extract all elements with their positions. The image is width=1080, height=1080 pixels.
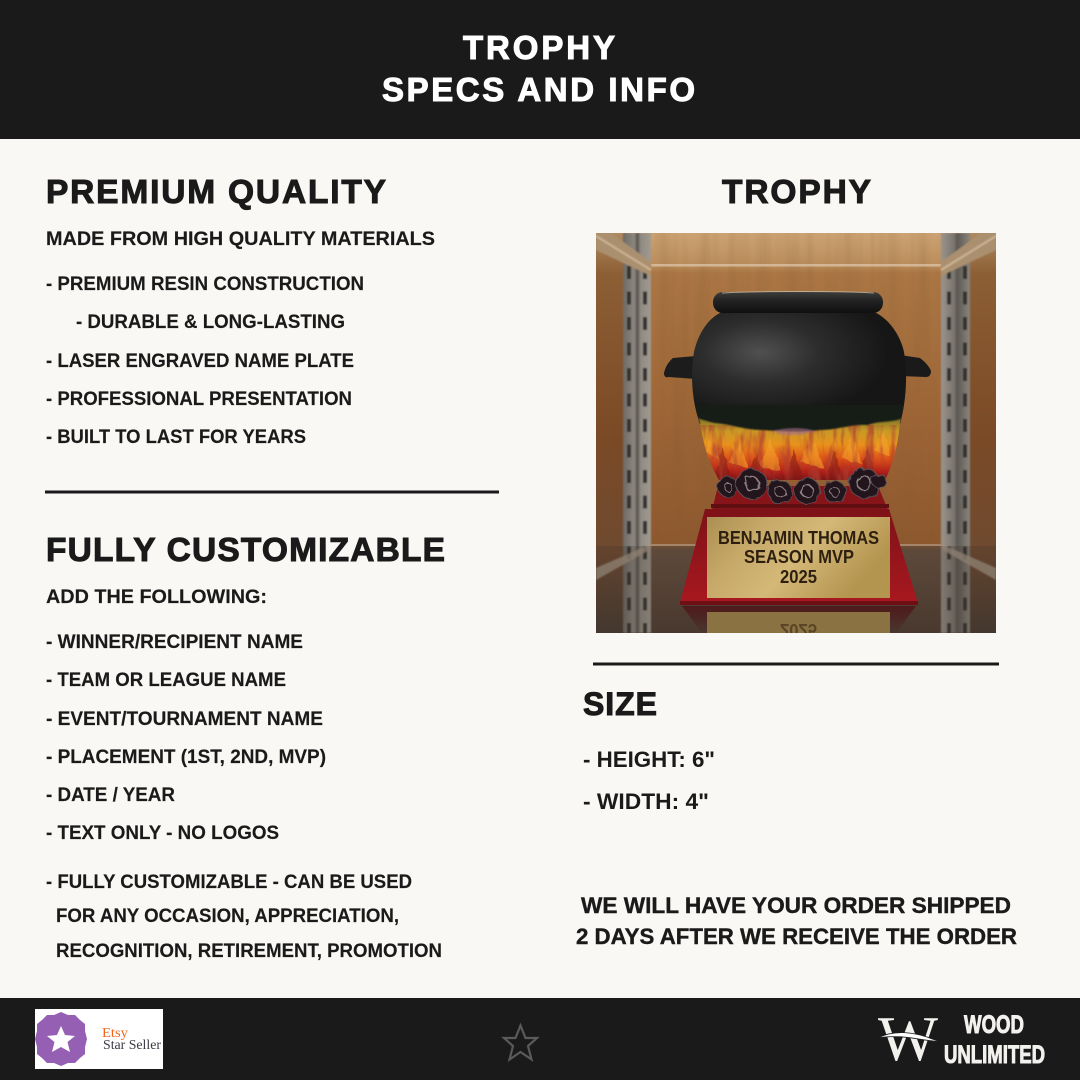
list: quality features: - PREMIUM RESIN CONSTRUCTION [46,273,364,295]
cauldron rim [713,292,883,313]
engraved name plate: 2025 [780,566,817,587]
engraved name plate: SEASON MVP [744,546,854,567]
display case background [596,233,996,633]
list: quality features: MADE FROM HIGH QUALITY MATERIALS [46,228,435,250]
list: customization options: - WINNER/RECIPIENT NAME [46,631,303,653]
cauldron handles [664,356,696,379]
list: customization options: - PLACEMENT (1ST, 2ND, MVP) [46,746,326,768]
shipping note [576,893,1017,949]
size values: - HEIGHT: 6" [583,747,715,772]
list: customization options: - DATE / YEAR [46,784,175,806]
title: TROPHY [463,29,615,66]
shipping note: WE WILL HAVE YOUR ORDER SHIPPED [581,893,1011,918]
footer band [0,998,1080,1080]
engraved name plate: BENJAMIN THOMAS [718,527,879,548]
header band with title [0,0,1080,139]
list: quality features: - DURABLE & LONG-LASTING [76,311,345,333]
list: customization options: FOR ANY OCCASION, APPRECIATION, [56,905,399,927]
list: customization options: - TEAM OR LEAGUE NAME [46,669,286,691]
heading: trophy: TROPHY [722,174,871,211]
heading: fully customizable: FULLY CUSTOMIZABLE [46,532,445,569]
cauldron body [692,312,906,424]
badge: etsy star seller: Star Seller [103,1037,162,1052]
list: quality features: - BUILT TO LAST FOR YEARS [46,426,306,448]
trophy base [680,486,918,605]
coals [718,468,886,504]
logo: wood unlimited: W [878,1003,939,1074]
list: customization options: - EVENT/TOURNAMENT NAME [46,708,323,730]
list: customization options: - FULLY CUSTOMIZABLE - CAN BE USED [46,871,412,893]
panel: premium quality [46,174,435,448]
title: SPECS AND INFO [382,71,695,108]
size values: - WIDTH: 4" [583,789,709,814]
flames [695,406,904,480]
engraved name plate [707,517,890,598]
badge: etsy star seller [35,1009,163,1069]
list: customization options: RECOGNITION, RETIREMENT, PROMOTION [56,940,442,962]
heading: size: SIZE [583,686,657,722]
list: quality features: - LASER ENGRAVED NAME PLATE [46,350,354,372]
logo: wood unlimited [878,1003,1045,1074]
shipping note: 2 DAYS AFTER WE RECEIVE THE ORDER [576,924,1017,949]
panel: size [583,686,715,814]
title [382,29,695,108]
heading: premium quality: PREMIUM QUALITY [46,174,386,211]
list: quality features: - PROFESSIONAL PRESENTATION [46,388,352,410]
reflection [682,606,916,633]
list: quality features [46,228,435,448]
size values [583,747,715,814]
badge: etsy star seller: Etsy [102,1026,128,1041]
logo: wood unlimited: WOOD [964,1011,1024,1039]
list: customization options: - TEXT ONLY - NO LOGOS [46,822,279,844]
panel: fully customizable [46,532,445,962]
list: customization options: ADD THE FOLLOWING: [46,586,267,608]
cauldron [664,292,931,424]
list: customization options [46,586,442,962]
icon: star [504,1026,537,1060]
trophy photo [596,233,996,641]
logo: wood unlimited: UNLIMITED [944,1041,1045,1069]
reflection: 2025 [780,620,817,641]
